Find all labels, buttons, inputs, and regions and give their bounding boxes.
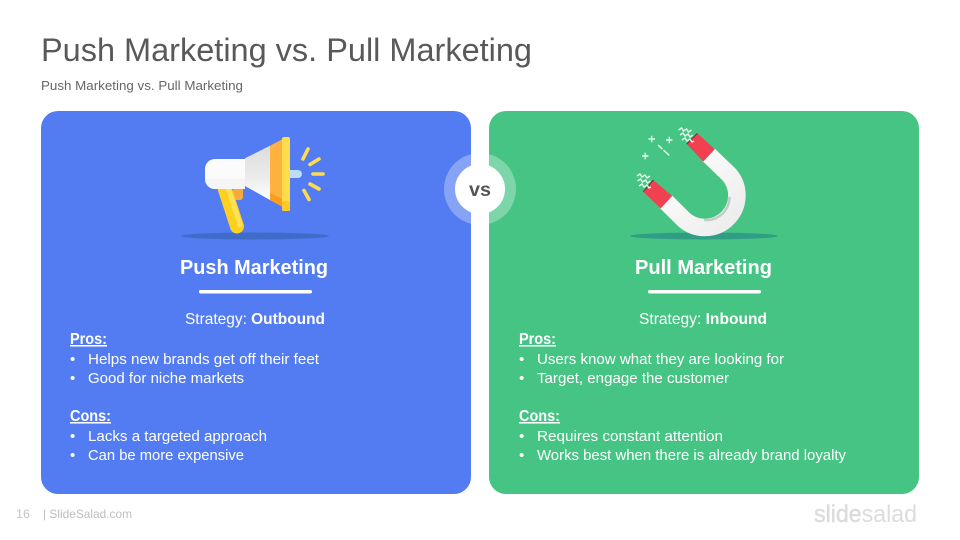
vs badge: vs xyxy=(469,180,491,201)
vs badge xyxy=(444,153,516,225)
cons list: push: • xyxy=(70,447,75,464)
page number: 16 xyxy=(16,507,30,521)
cons list: pull: Works best when there is already brand loyalty xyxy=(537,447,846,464)
cons list: push: • xyxy=(70,428,75,445)
cons list: push: Cons: xyxy=(70,408,111,425)
cons list: push: Lacks a targeted approach xyxy=(88,428,267,445)
title: Push Marketing vs. Pull Marketing xyxy=(41,32,532,68)
cons list: push xyxy=(70,408,267,464)
cons list: pull: • xyxy=(519,447,524,464)
cons list: push: Can be more expensive xyxy=(88,447,244,464)
panel: push marketing xyxy=(41,111,471,494)
cons list: pull: Cons: xyxy=(519,408,560,425)
pros list: pull xyxy=(519,331,784,387)
pros list: push: Pros: xyxy=(70,331,107,348)
panel: pull marketing xyxy=(489,111,919,494)
pros list: pull: • xyxy=(519,370,524,387)
pros list: pull: Target, engage the customer xyxy=(537,370,729,387)
cons list: pull: • xyxy=(519,428,524,445)
pros list: pull: Users know what they are looking for xyxy=(537,351,784,368)
icon: megaphone xyxy=(181,137,329,240)
logo: slidesalad: slidesalad xyxy=(814,501,917,528)
icon: magnet xyxy=(630,128,778,240)
footer source: | SlideSalad.com xyxy=(43,507,132,521)
pros list: push: • xyxy=(70,351,75,368)
pros list: pull: • xyxy=(519,351,524,368)
heading: push marketing: Push Marketing xyxy=(180,257,328,279)
subtitle: Push Marketing vs. Pull Marketing xyxy=(41,78,243,93)
pros list: push: Helps new brands get off their feet xyxy=(88,351,320,368)
pros list: push: • xyxy=(70,370,75,387)
cons list: pull xyxy=(519,408,846,464)
strategy: outbound: Strategy: Outbound xyxy=(185,311,325,328)
strategy: inbound: Strategy: Inbound xyxy=(639,311,767,328)
cons list: pull: Requires constant attention xyxy=(537,428,723,445)
pros list: pull: Pros: xyxy=(519,331,556,348)
pros list: push xyxy=(70,331,320,387)
heading: pull marketing: Pull Marketing xyxy=(635,257,772,279)
pros list: push: Good for niche markets xyxy=(88,370,244,387)
